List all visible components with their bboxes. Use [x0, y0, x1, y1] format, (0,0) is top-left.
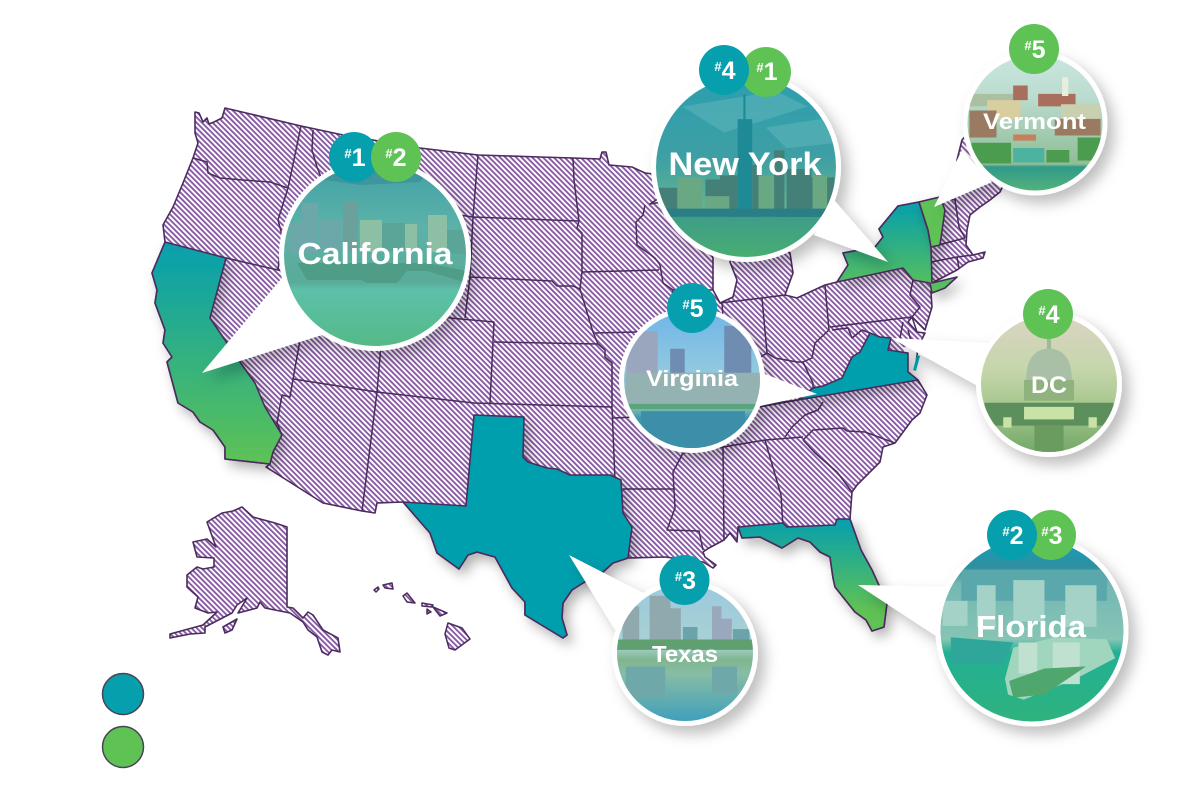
- pointer and ring: Virginia: [619, 307, 817, 453]
- state: Alaska: [170, 507, 340, 655]
- badge: DC rank 4: [1023, 289, 1073, 339]
- pointer and ring: Texas: [569, 555, 758, 726]
- badges: Florida rank 2 and rank 3: 3: [1049, 522, 1063, 550]
- state: Texas: [403, 415, 632, 638]
- label: New York: New York: [668, 146, 822, 182]
- state borders: [193, 126, 973, 550]
- state: Hawaii: [374, 583, 470, 650]
- badge: Vermont rank 5: 5: [1032, 36, 1046, 64]
- badge: Virginia rank 5: 5: [690, 295, 704, 323]
- label: DC: DC: [1031, 372, 1067, 399]
- photo: US Capitol: [980, 315, 1118, 453]
- legend: green swatch: [102, 726, 144, 768]
- state: Virginia: [798, 333, 920, 400]
- badges: California rank 1 and rank 2: #: [344, 146, 352, 161]
- badges: California rank 1 and rank 2: #: [385, 146, 393, 161]
- callout: New York: [651, 72, 888, 262]
- label: Vermont: Vermont: [983, 109, 1087, 134]
- badges: New York rank 4 and rank 1: #: [714, 59, 722, 74]
- badges: California rank 1 and rank 2: 2: [393, 144, 407, 172]
- photo: Manhattan skyline: [654, 75, 838, 259]
- badges: California rank 1 and rank 2: 1: [352, 144, 366, 172]
- badges: Florida rank 2 and rank 3: #: [1041, 524, 1049, 539]
- callout: Virginia: [619, 307, 817, 453]
- badge: Virginia rank 5: #: [682, 297, 690, 312]
- label: Virginia: Virginia: [646, 366, 739, 391]
- badges: New York rank 4 and rank 1: #: [756, 60, 764, 75]
- badge: Vermont rank 5: #: [1024, 38, 1032, 53]
- legend: teal swatch: [102, 674, 144, 714]
- pointer and ring: Vermont: [934, 50, 1108, 207]
- label: California: California: [298, 236, 453, 271]
- photo: Austin skyline: [616, 584, 754, 722]
- state: New York: [837, 202, 957, 293]
- label: Florida: Florida: [976, 609, 1087, 644]
- state: Florida: [738, 519, 887, 631]
- photo: Miami aerial: [939, 537, 1125, 723]
- map: contiguous United States: [152, 108, 1015, 638]
- photo: San Diego skyline: [284, 170, 466, 346]
- badges: New York rank 4 and rank 1: 1: [764, 58, 778, 86]
- badge: Texas rank 3: 3: [682, 567, 696, 595]
- chesapeake bay cut: [903, 347, 917, 372]
- callout: Texas: [569, 555, 758, 726]
- callout: California: [202, 158, 471, 373]
- callout: Florida: [858, 534, 1128, 726]
- badges: New York rank 4 and rank 1: 4: [722, 57, 736, 85]
- callout: DC: [891, 311, 1122, 457]
- badges: New York rank 4 and rank 1: [699, 45, 791, 97]
- badge: Virginia rank 5: [667, 283, 717, 333]
- photo: Burlington waterfront: [966, 54, 1104, 192]
- state: Vermont: [919, 197, 945, 247]
- state: California: [152, 242, 282, 464]
- pointer and ring: Florida: [858, 534, 1128, 726]
- callout: Vermont: [934, 50, 1108, 207]
- badge: DC rank 4: #: [1038, 303, 1046, 318]
- badge: Texas rank 3: [660, 555, 710, 605]
- badge: DC rank 4: 4: [1046, 301, 1060, 329]
- label: Texas: Texas: [652, 641, 718, 667]
- badges: Florida rank 2 and rank 3: 2: [1010, 522, 1024, 550]
- pointer and ring: DC: [891, 311, 1122, 457]
- badges: California rank 1 and rank 2: [329, 132, 421, 182]
- pointer and ring: California: [202, 159, 471, 373]
- pointer and ring: New York: [651, 72, 888, 262]
- badge: Vermont rank 5: [1009, 24, 1059, 74]
- photo: Richmond plaza: [623, 311, 761, 449]
- badge: Texas rank 3: #: [675, 569, 683, 584]
- badges: Florida rank 2 and rank 3: #: [1002, 524, 1010, 539]
- badges: Florida rank 2 and rank 3: [987, 510, 1076, 560]
